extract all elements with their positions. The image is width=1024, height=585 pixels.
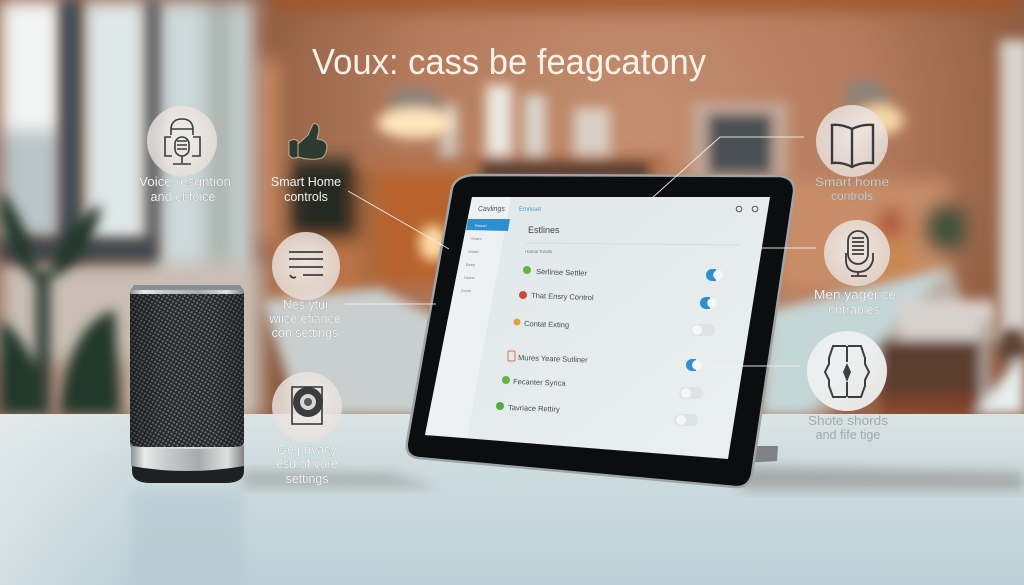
callout: smart home controls left <box>271 124 341 204</box>
icon: microphone in frame <box>147 106 217 176</box>
callout label: Shote shords <box>808 414 888 428</box>
callout: smart home controls left: controls <box>284 190 328 204</box>
callout label <box>276 443 338 486</box>
callout label: Ge privacy <box>277 443 338 457</box>
callout: voice enhancement settings <box>268 232 341 340</box>
icon: list <box>272 232 340 300</box>
tablet screen <box>425 197 770 459</box>
screen subheading: Hamal Tonals <box>525 249 553 254</box>
callout label: Men yagerice <box>814 288 896 302</box>
screen heading: Estlines <box>528 225 560 235</box>
screen sidebar <box>425 197 511 437</box>
row: Setting 5 <box>502 376 703 399</box>
row: Setting 3 <box>514 318 715 336</box>
lamps <box>377 80 904 138</box>
screen header: Emrkset <box>519 207 541 213</box>
plant <box>0 190 120 415</box>
sidebar labels: Resort <box>475 223 488 228</box>
tablet: Beep <box>466 262 476 267</box>
callout: microphone settings: ontrables <box>828 303 880 317</box>
title: Voux: cass be feagcatony <box>312 41 706 82</box>
callout: shortcuts: and fife tige <box>816 428 880 442</box>
icon: open book <box>816 105 888 177</box>
callout: smart home controls right <box>815 105 889 203</box>
callout label: Nes ytur <box>283 298 329 312</box>
tablet stand <box>745 446 778 463</box>
tablet: Zoom <box>461 288 472 293</box>
row: Setting 1: Serlinse Settler <box>536 267 588 278</box>
screen header <box>478 206 758 213</box>
selected sidebar item <box>466 219 510 231</box>
callout label <box>268 298 341 340</box>
row: Setting 4: Mures Yeare Sutliner <box>518 353 588 364</box>
row: Setting 6 <box>496 402 698 426</box>
callout: voice recognition <box>139 106 231 204</box>
icon: disc on page <box>272 372 342 442</box>
speaker silver band <box>131 446 244 471</box>
table shadows <box>243 470 440 488</box>
table surface <box>0 414 1024 585</box>
screen header: Cavlings <box>478 206 505 213</box>
tablet frame <box>407 175 794 487</box>
smart speaker <box>130 285 244 483</box>
row: Setting 5: Fecanter Syrica <box>513 377 567 388</box>
tablet: Home <box>464 275 475 280</box>
speaker base <box>132 465 244 483</box>
row: Setting 4 <box>508 351 704 371</box>
callout label: con settings <box>272 326 338 340</box>
row: Setting 2: That Ensry Control <box>531 291 594 302</box>
icon: microphone <box>824 220 890 286</box>
callout: microphone settings <box>814 220 896 317</box>
row: Setting 1 <box>523 266 724 281</box>
callout label: settings <box>285 472 329 486</box>
callout label: Smart Home <box>271 175 341 189</box>
speaker top cap <box>130 285 244 294</box>
callout label: wiice efiance <box>268 312 341 326</box>
row: Setting 3: Contat Exting <box>524 319 569 330</box>
icon: thumbs up <box>289 124 327 159</box>
callout: shortcuts <box>807 331 888 442</box>
connector lines <box>345 137 816 366</box>
callout label: Smart home <box>815 175 889 189</box>
callout label: Voice resgntion <box>139 175 231 189</box>
callout: privacy <box>272 372 342 486</box>
callout: smart home controls right: controls <box>831 189 873 203</box>
speaker body mesh <box>130 292 244 447</box>
row: Setting 6: Tavriace Rettiry <box>508 403 560 414</box>
speaker reflection <box>132 490 244 585</box>
callout: voice recognition: and et foice <box>151 190 215 204</box>
tablet <box>407 175 794 487</box>
callout label: esd of vore <box>276 457 338 471</box>
icon: compass shield <box>807 331 887 411</box>
tablet: Share <box>471 236 482 241</box>
row: Setting 2 <box>519 291 718 309</box>
tablet: Smart <box>468 249 480 254</box>
